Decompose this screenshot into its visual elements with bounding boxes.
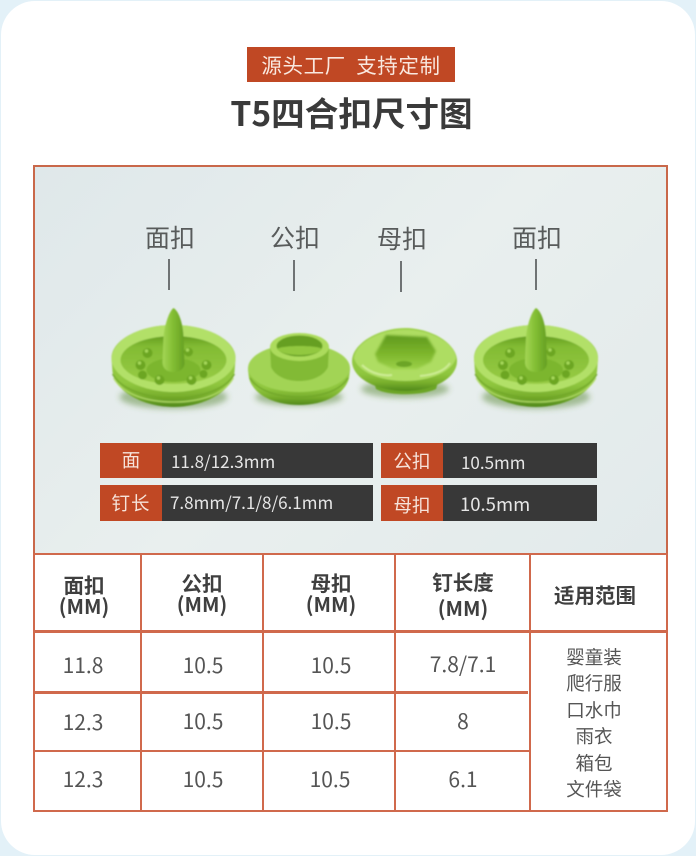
column header: pin length: (MM) [438, 592, 488, 622]
spec bar: face size [100, 443, 373, 478]
row 3: 10.5 [310, 764, 350, 794]
applicable range list: 文件袋 [566, 776, 622, 802]
illustration: four green snap button parts [110, 307, 599, 413]
column header: female button [306, 567, 356, 618]
leader line: male button [293, 260, 295, 291]
spec bar: male button size [381, 443, 597, 478]
row 2: 10.5 [311, 706, 351, 736]
row 3: 12.3 [63, 764, 103, 794]
row 1: 7.8/7.1 [430, 649, 496, 679]
column header: face button: 面扣 [64, 569, 104, 599]
label: face button left: 面扣 [145, 219, 195, 255]
female button [352, 328, 457, 398]
bar label: 面 [122, 447, 140, 473]
column header: pin length: 钉长度 [432, 566, 494, 596]
row 2: 8 [457, 706, 469, 736]
row 1: 10.5 [183, 650, 223, 680]
column header: pin length [432, 566, 494, 622]
bar value: 10.5mm [461, 449, 526, 474]
panel: product photo and size bars [33, 165, 668, 555]
spec bar: pin length [100, 485, 373, 521]
row 2 [63, 706, 469, 737]
column header: female button: 母扣 [310, 567, 352, 597]
applicable range list: 箱包 [575, 750, 612, 776]
bar value: 11.8/12.3mm [171, 448, 275, 473]
label: male button: 公扣 [270, 219, 320, 255]
column header: applicable range: 适用范围 [554, 579, 636, 609]
applicable range list: 婴童装 [566, 644, 622, 670]
applicable range list [566, 644, 622, 802]
column header: face button [59, 569, 109, 620]
leader line: face button left [168, 259, 170, 290]
face button right [474, 308, 598, 409]
bar label [381, 443, 443, 478]
bar label: 公扣 [393, 448, 430, 474]
bar label: 母扣 [393, 492, 430, 518]
bar label [100, 443, 162, 478]
label: female button: 母扣 [377, 220, 427, 256]
row 2: 12.3 [63, 707, 103, 737]
label: face button right: 面扣 [512, 219, 562, 255]
spec bar: female button size [381, 485, 597, 521]
badge: factory source, customization supported: 源头工厂 支持定制 [261, 49, 441, 79]
column header: face button: (MM) [59, 590, 109, 620]
face button left [112, 308, 236, 409]
bar label [381, 485, 443, 521]
applicable range list: 爬行服 [566, 670, 622, 696]
male button [248, 333, 350, 406]
bar value: 10.5mm [460, 491, 530, 517]
applicable range list: 口水巾 [566, 697, 622, 723]
row 1 [63, 649, 496, 680]
row 3: 10.5 [183, 764, 223, 794]
column header: male button [177, 567, 227, 618]
bar label: 钉长 [111, 490, 150, 516]
row 3 [63, 764, 478, 794]
row 3: 6.1 [448, 764, 478, 794]
row 1: 10.5 [311, 650, 351, 680]
column header: male button: 公扣 [182, 567, 222, 597]
title: T5四合扣尺寸图 [230, 87, 473, 136]
bar value: 7.8mm/7.1/8/6.1mm [170, 489, 333, 514]
row 2: 10.5 [183, 706, 223, 736]
column header: female button: (MM) [306, 588, 356, 618]
row 1: 11.8 [63, 650, 103, 680]
leader line: female button [400, 261, 402, 292]
column header: male button: (MM) [177, 588, 227, 618]
leader line: face button right [535, 259, 537, 290]
applicable range list: 雨衣 [575, 723, 612, 749]
size table [33, 555, 668, 812]
bar label [100, 485, 162, 521]
